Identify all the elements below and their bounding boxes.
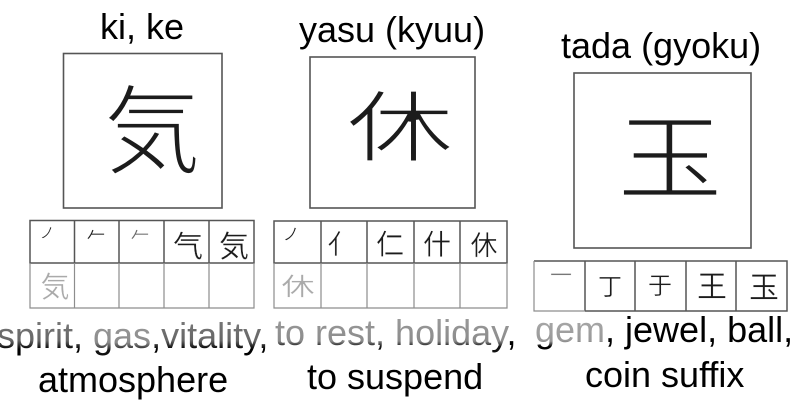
- stroke order grid: 玉: 王: [697, 271, 727, 304]
- stroke order grid: 休: [274, 221, 507, 308]
- stroke order grid: 気: ノ: [39, 225, 55, 242]
- meaning: gem, jewel, ball, coin suffix: [535, 309, 793, 395]
- stroke order grid: 気: 𠂉: [86, 226, 106, 247]
- panel: ki, ke kanji: [0, 6, 268, 400]
- stroke order grid: 気: 气: [173, 231, 203, 264]
- panel: yasu (kyuu) kanji: [274, 9, 516, 397]
- meaning: spirit, gas, vitality, atmosphere: [0, 315, 268, 400]
- large kanji box: 玉: [574, 73, 751, 248]
- meaning: to rest, holiday, to suspend: to rest, holiday,: [275, 312, 516, 353]
- meaning: spirit, gas, vitality, atmosphere: spirit, gas,vitality,: [0, 315, 268, 356]
- stroke order grid: 休: 休: [281, 273, 315, 301]
- reading: ki, ke: ki, ke: [100, 6, 184, 47]
- stroke order grid: 玉: [534, 261, 787, 311]
- meaning: gem, jewel, ball, coin suffix: coin suffix: [585, 354, 744, 395]
- stroke order grid: 休: ノ: [282, 225, 300, 244]
- meaning: to rest, holiday, to suspend: [275, 312, 516, 397]
- stroke order grid: 気: [30, 220, 254, 308]
- stroke order grid: 気: 𠂉: [130, 226, 150, 247]
- large kanji box: 気: [64, 54, 222, 208]
- panel: tada (gyoku) kanji: [534, 25, 793, 395]
- stroke order grid: 休: 休: [470, 231, 498, 261]
- stroke order grid: 玉: 于: [648, 273, 672, 300]
- stroke order grid: 休: 亻: [328, 230, 354, 260]
- stroke order grid: 玉: 丁: [598, 274, 622, 301]
- stroke order grid: 休: 仁: [376, 229, 404, 260]
- stroke order grid: 休: 什: [423, 229, 451, 260]
- meaning: gem, jewel, ball, coin suffix: gem, jewel, ball,: [535, 309, 793, 350]
- stroke order grid: 玉: 玉: [749, 272, 779, 305]
- reading: tada (gyoku): tada (gyoku): [561, 25, 761, 66]
- stroke order grid: 気: 気: [40, 271, 70, 304]
- stroke order grid: 気: 気: [219, 231, 249, 264]
- large kanji box: 気: 気: [103, 77, 201, 187]
- meaning: to rest, holiday, to suspend: to suspend: [307, 356, 483, 397]
- reading: yasu (kyuu): yasu (kyuu): [299, 9, 485, 50]
- stroke order grid: 玉: 一: [550, 263, 572, 288]
- large kanji box: 休: [310, 57, 475, 208]
- large kanji box: 玉: 玉: [617, 108, 723, 213]
- large kanji box: 休: 休: [346, 85, 454, 172]
- meaning: spirit, gas, vitality, atmosphere: atmosphere: [38, 359, 228, 400]
